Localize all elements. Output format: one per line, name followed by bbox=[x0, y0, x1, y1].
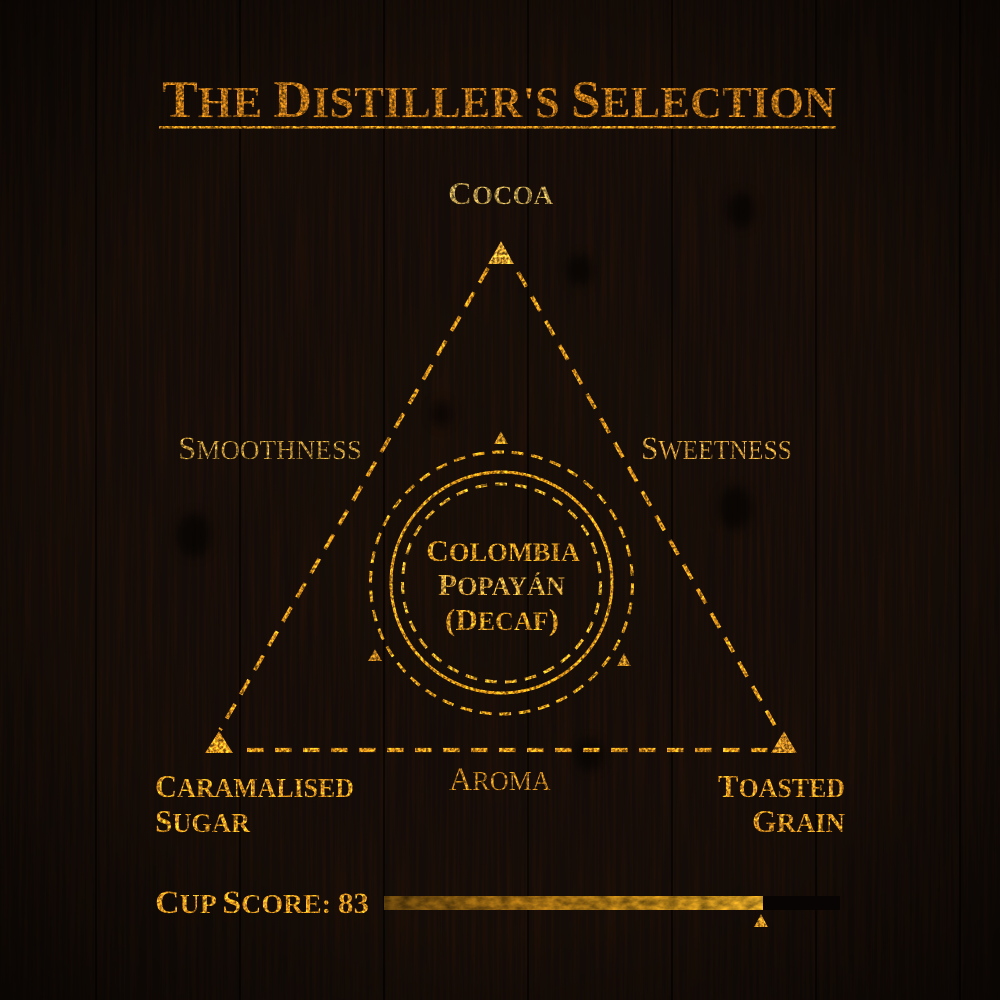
label: Caramalised Sugar bbox=[155, 768, 354, 839]
label: Caramalised Sugar: SUGAR bbox=[155, 803, 250, 839]
title: THE DISTILLER'S SELECTION bbox=[162, 71, 836, 129]
coffee name bbox=[426, 533, 580, 637]
icon: top small marker bbox=[494, 431, 508, 444]
icon: left small marker bbox=[368, 649, 382, 661]
flavour triangle bbox=[205, 241, 797, 753]
coffee name: POPAYÁN bbox=[438, 567, 565, 602]
label: Toasted Grain: GRAIN bbox=[752, 803, 845, 839]
label: Sweetness: SWEETNESS bbox=[641, 431, 792, 467]
label: Toasted Grain bbox=[718, 768, 845, 839]
score bar fill bbox=[384, 896, 763, 910]
label: Aroma: AROMA bbox=[449, 762, 551, 798]
cup score bbox=[155, 885, 840, 927]
coffee name: COLOMBIA bbox=[426, 533, 580, 568]
central emblem bbox=[368, 431, 632, 714]
triangle edge: right bbox=[518, 272, 778, 731]
triangle edge: bottom bbox=[247, 748, 770, 752]
label: Toasted Grain: TOASTED bbox=[718, 768, 845, 804]
label: Smoothness: SMOOTHNESS bbox=[178, 431, 362, 467]
icon: left marker bbox=[205, 731, 233, 753]
coffee name: (DECAF) bbox=[445, 602, 559, 637]
icon: score marker bbox=[754, 914, 768, 927]
outer dashed ring bbox=[370, 452, 632, 714]
axis and vertex labels bbox=[155, 175, 845, 839]
label: Cocoa: COCOA bbox=[448, 175, 553, 211]
score bar track bbox=[384, 896, 840, 910]
label: cup score: CUP SCORE: 83 bbox=[155, 885, 369, 921]
inner dashed ring bbox=[402, 484, 600, 682]
triangle edge: left bbox=[220, 268, 488, 730]
icon: right marker bbox=[771, 731, 797, 753]
label: Caramalised Sugar: CARAMALISED bbox=[155, 768, 354, 804]
icon: apex marker bbox=[488, 241, 514, 264]
icon: right small marker bbox=[617, 653, 631, 666]
solid ring bbox=[391, 472, 612, 693]
